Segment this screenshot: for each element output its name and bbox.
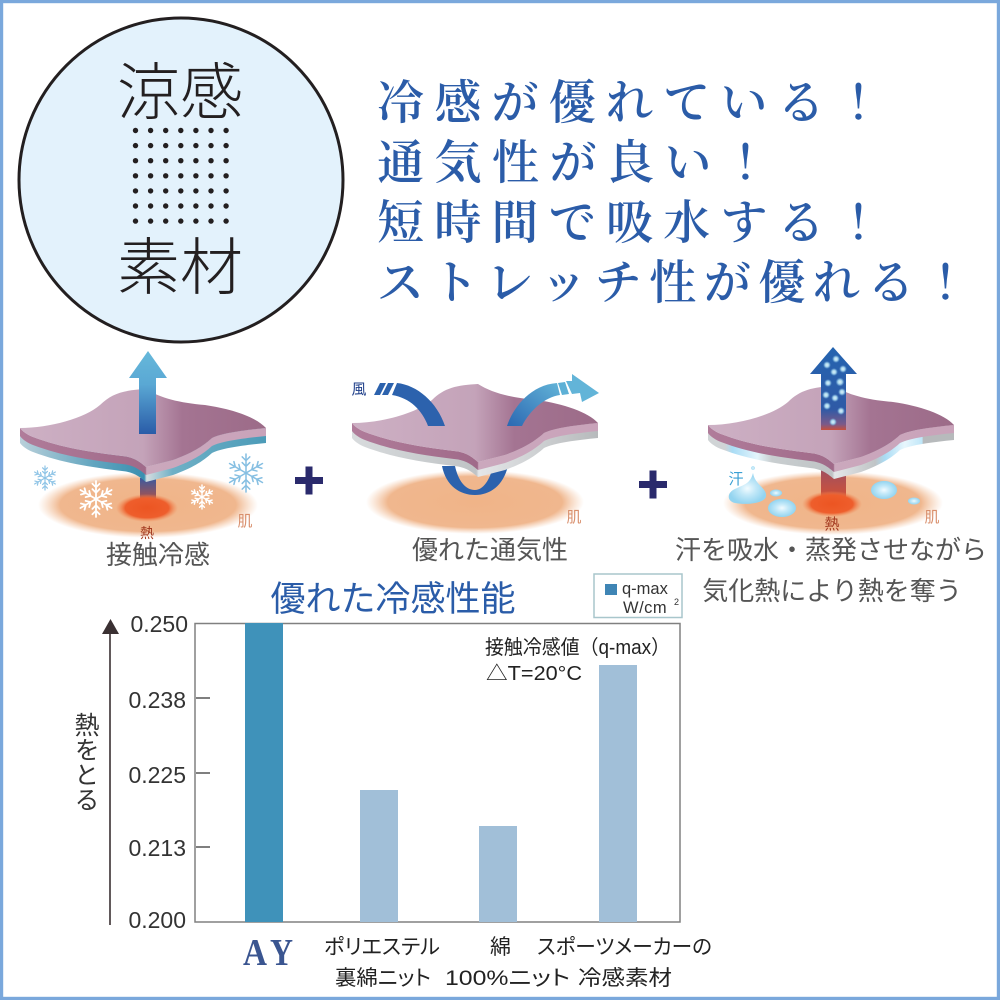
label: sports maker: スポーツメーカーの (537, 936, 712, 959)
label: wind: 風 (351, 381, 367, 398)
x axis labels (243, 932, 712, 990)
y axis title: 熱をとる (71, 712, 99, 812)
arrow: wind out (507, 374, 599, 426)
label: heat: 熱 (824, 516, 840, 533)
icon: snowflake white small (190, 485, 214, 509)
bar chart (71, 611, 680, 933)
y axis arrow (109, 632, 111, 925)
caption: 優れた通気性 (412, 535, 568, 565)
label: skin: 肌 (924, 509, 940, 526)
legend: q-max (622, 580, 669, 598)
annotation: △T=20°C (486, 662, 582, 685)
label: sweat: 汗 (728, 471, 744, 488)
chart title: 優れた冷感性能 (270, 580, 516, 619)
headline: four benefit lines: 短時間で吸水する！ (377, 186, 882, 253)
annotation: 接触冷感値（q-max） (485, 636, 670, 659)
y axis tick labels: 0.213 (128, 835, 186, 861)
heat column (802, 470, 862, 517)
label: polyester: ポリエステル (324, 936, 440, 959)
legend: 2 (674, 597, 679, 607)
label: AY: Y (270, 932, 293, 974)
bar: polyester (360, 790, 398, 922)
label: 100% knit: 100%ニット (445, 967, 570, 990)
arrow: wind passing below (442, 466, 508, 495)
skin ellipse (38, 472, 258, 538)
caption: 接触冷感 (106, 540, 210, 570)
bar: AY (245, 623, 283, 922)
sweat drops (729, 466, 920, 517)
label: AY: A (243, 932, 267, 974)
arrow: heat rising (129, 351, 167, 434)
y axis tick labels (128, 611, 188, 933)
panel: contact cooling (20, 351, 266, 570)
plot frame (195, 624, 680, 922)
y axis tick labels: 0.200 (128, 907, 186, 933)
badge text: 素材: 素材 (117, 234, 243, 303)
label: cool material: 冷感素材 (578, 967, 672, 990)
headline: four benefit lines (377, 66, 969, 313)
caption line 1: 汗を吸水・蒸発させながら (675, 535, 987, 565)
fabric layers (708, 386, 954, 479)
headline: four benefit lines: ストレッチ性が優れる！ (377, 246, 969, 313)
fabric layers (352, 384, 598, 477)
panel: breathability (351, 374, 599, 565)
heat column (116, 478, 178, 522)
fabric layers (20, 389, 266, 482)
badge: cool material circle (19, 18, 343, 342)
y axis tick labels: 0.238 (128, 687, 186, 713)
bar: sports maker (599, 665, 637, 922)
skin ellipse (723, 471, 943, 535)
skin ellipse (366, 470, 584, 534)
label: AY (243, 932, 293, 974)
badge text: 涼感: 涼感 (117, 59, 243, 128)
label: skin: 肌 (566, 509, 582, 526)
ticks (196, 698, 210, 847)
legend (594, 574, 682, 618)
y axis tick labels: 0.250 (130, 611, 188, 637)
y axis tick labels: 0.225 (128, 762, 186, 788)
headline: four benefit lines: 通気性が良い！ (377, 126, 769, 193)
dot matrix (133, 128, 229, 224)
headline: four benefit lines: 冷感が優れている！ (377, 66, 882, 133)
plus (639, 470, 667, 498)
icon: snowflake white (79, 481, 113, 517)
arrow: wind in (374, 383, 445, 426)
label: skin: 肌 (237, 513, 253, 530)
label: fleece knit: 裏綿ニット (335, 967, 431, 990)
icon: snowflake large (228, 454, 264, 492)
label: cotton: 綿 (490, 936, 511, 959)
label: heat: 熱 (140, 525, 154, 541)
arrow: vapor rising (810, 347, 857, 430)
annotation (485, 636, 670, 685)
legend: W/cm (623, 599, 667, 617)
caption line 2: 気化熱により熱を奪う (702, 576, 962, 606)
panel: sweat absorption (675, 347, 987, 606)
icon: snowflake (33, 466, 57, 490)
plus (295, 466, 323, 494)
bar: cotton (479, 826, 517, 922)
